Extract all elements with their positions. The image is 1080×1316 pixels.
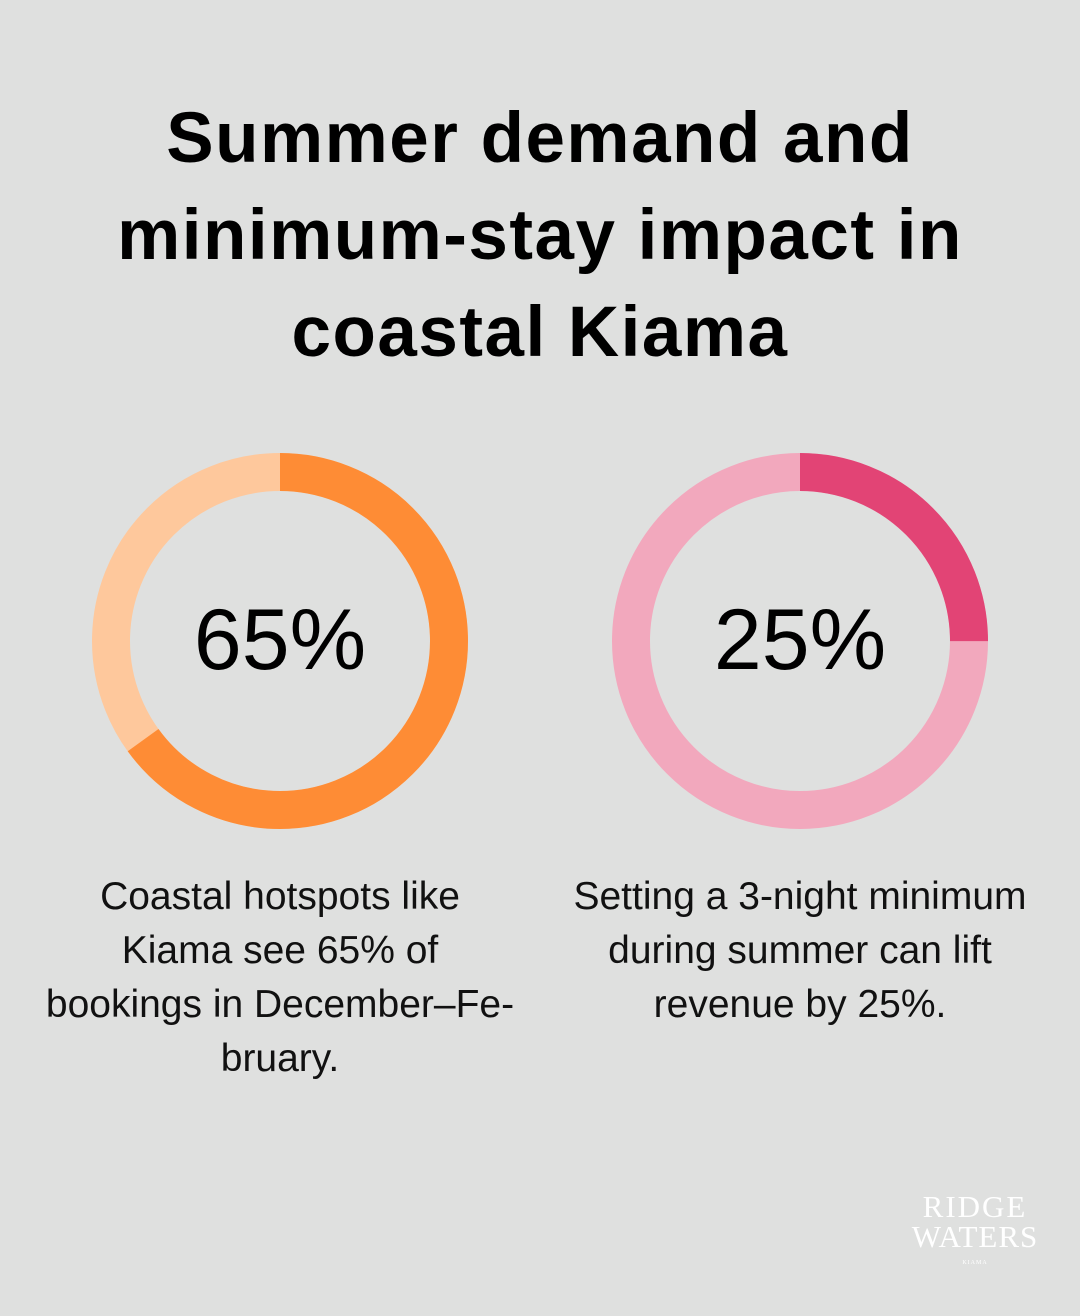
caption: left bbox=[46, 875, 514, 1080]
chart: 65% donut: 65% bbox=[194, 592, 366, 688]
chart: 65% donut bbox=[92, 453, 468, 829]
title: minimum-stay impact in bbox=[117, 196, 963, 275]
caption: left: Coastal hotspots like bbox=[100, 875, 460, 918]
logo: WATERS bbox=[912, 1219, 1038, 1254]
caption: left: bruary. bbox=[221, 1037, 339, 1080]
title: coastal Kiama bbox=[291, 293, 789, 372]
caption: right: Setting a 3-night minimum bbox=[573, 875, 1027, 918]
title bbox=[117, 99, 963, 372]
chart: 25% donut bbox=[612, 453, 988, 829]
logo: KIAMA bbox=[962, 1260, 988, 1266]
logo: RIDGE bbox=[923, 1189, 1027, 1224]
logo bbox=[912, 1189, 1038, 1266]
caption: left: Kiama see 65% of bbox=[122, 929, 438, 972]
caption: right bbox=[573, 875, 1027, 1026]
caption: right: revenue by 25%. bbox=[654, 983, 946, 1026]
chart: 25% donut: 25% bbox=[714, 592, 886, 688]
caption: right: during summer can lift bbox=[608, 929, 992, 972]
caption: left: bookings in December–Fe- bbox=[46, 983, 514, 1026]
title: Summer demand and bbox=[166, 99, 914, 178]
